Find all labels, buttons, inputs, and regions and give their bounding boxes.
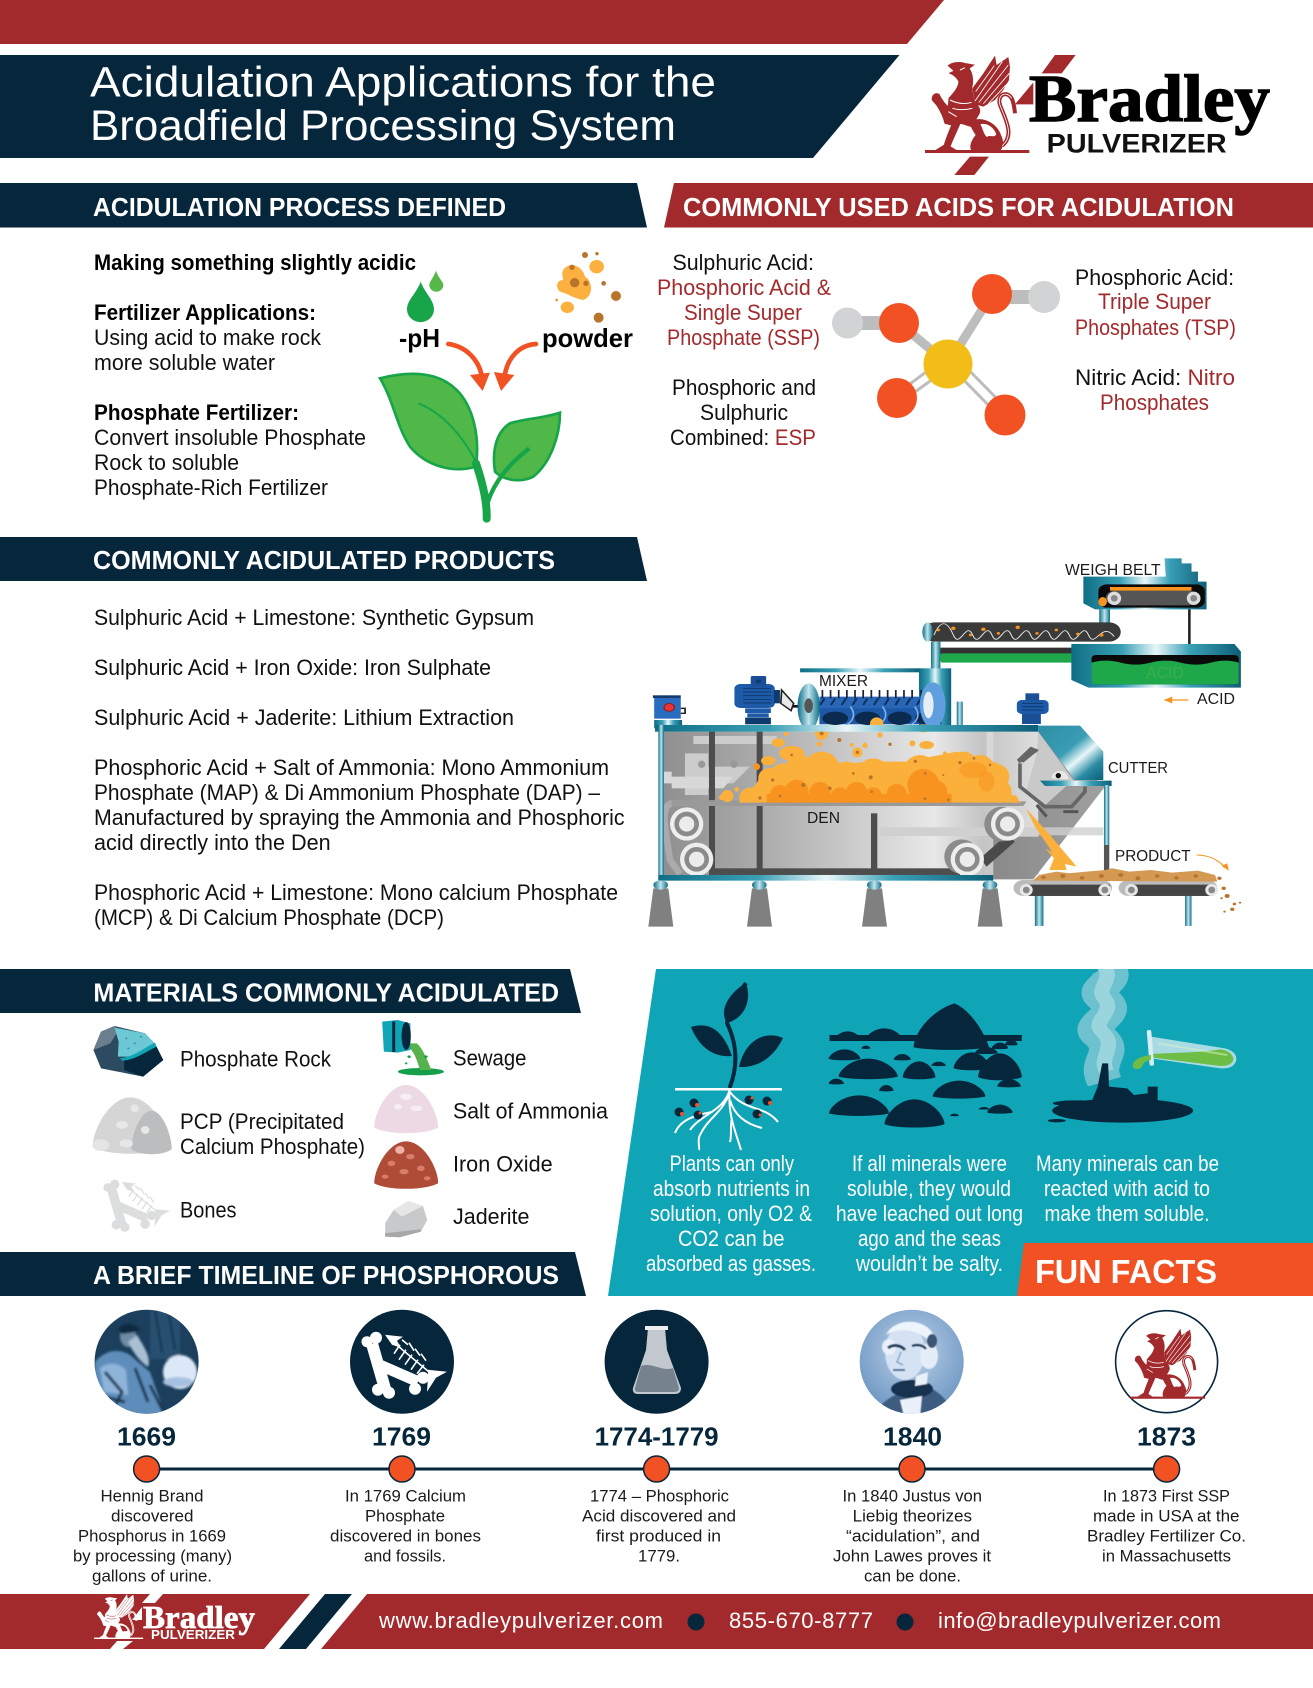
acid list right: Phosphoric Acid: <box>1075 265 1234 290</box>
year: 1840 <box>883 1422 942 1452</box>
description <box>330 1487 481 1566</box>
icon: mineral rocks <box>829 1003 1022 1128</box>
year: 1774-1779 <box>595 1422 719 1452</box>
separator dot <box>688 1614 704 1630</box>
fact 3 text: reacted with acid to <box>1044 1176 1210 1201</box>
fun facts tab: FUN FACTS <box>1035 1253 1217 1290</box>
label: PCP: Calcium Phosphate) <box>180 1134 365 1159</box>
product list: Sulphuric Acid + Jaderite: Lithium Extraction <box>94 705 514 730</box>
description: Phosphorus in 1669 <box>78 1527 226 1546</box>
definition text: Phosphate-Rich Fertilizer <box>94 475 328 500</box>
marker <box>644 1456 670 1482</box>
marker <box>389 1456 415 1482</box>
product list: (MCP) & Di Calcium Phosphate (DCP) <box>94 905 444 930</box>
definition text <box>94 250 416 500</box>
label: bones: Bones <box>180 1198 236 1223</box>
frame <box>655 725 1038 732</box>
1873 entry <box>1087 1311 1246 1566</box>
footer logo: PULVERIZER <box>151 1627 236 1642</box>
fact 1 text: absorbed as gasses. <box>646 1251 816 1276</box>
panel: acidulation process defined <box>0 183 647 519</box>
description: “acidulation”, and <box>846 1527 980 1546</box>
diagram labels: PRODUCT <box>1115 848 1191 865</box>
1840 entry <box>833 1309 991 1586</box>
screw conveyor tube <box>922 622 1121 670</box>
description: In 1873 First SSP <box>1103 1487 1230 1506</box>
fact 1 text: Plants can only <box>670 1151 794 1176</box>
diagram labels: DEN <box>807 810 840 827</box>
year: 1769 <box>372 1422 431 1452</box>
icon: plant <box>380 374 560 519</box>
description: In 1769 Calcium <box>345 1487 466 1506</box>
definition text: Phosphate Fertilizer: <box>94 400 299 425</box>
icon: bones <box>103 1180 170 1232</box>
logo: Bradley Pulverizer: Bradley <box>1029 62 1270 136</box>
description: made in USA at the <box>1093 1507 1240 1526</box>
acid list left: Combined: ESP <box>670 425 816 450</box>
icon: sewage <box>382 1020 444 1075</box>
icon: griffin in circle <box>1116 1311 1218 1413</box>
orange pile <box>738 752 1022 803</box>
description: can be done. <box>864 1567 961 1586</box>
acid list right: Phosphates <box>1100 390 1209 415</box>
acid list left: Phosphoric Acid & <box>657 275 831 300</box>
website: www.bradleypulverizer.com <box>378 1608 663 1633</box>
description: gallons of urine. <box>92 1567 212 1586</box>
fact 1 text: CO2 can be <box>678 1226 784 1251</box>
acid list left: Sulphuric Acid: <box>672 250 814 275</box>
1774-1779 entry <box>582 1310 736 1566</box>
panel: fun facts <box>608 967 1313 1296</box>
panel: brief timeline of phosphorous <box>0 1252 1246 1586</box>
description: Bradley Fertilizer Co. <box>1087 1527 1246 1546</box>
heading bar: ACIDULATION PROCESS DEFINED <box>93 192 506 222</box>
product list: Sulphuric Acid + Iron Oxide: Iron Sulphate <box>94 655 491 680</box>
footer logo: Bradley <box>143 1599 255 1635</box>
label: phosphate rock: Phosphate Rock <box>180 1047 332 1072</box>
panel: materials commonly acidulated <box>0 969 609 1237</box>
legs <box>648 888 1003 927</box>
email: info@bradleypulverizer.com <box>938 1608 1221 1633</box>
fact 2 text: If all minerals were <box>852 1151 1007 1176</box>
icon: molecule <box>832 274 1060 436</box>
logo: Bradley Pulverizer: PULVERIZER <box>1047 129 1227 159</box>
description: discovered in bones <box>330 1527 481 1546</box>
footer stripes <box>264 1594 367 1649</box>
heading bar: COMMONLY USED ACIDS FOR ACIDULATION <box>683 192 1234 222</box>
label: PCP <box>180 1109 365 1159</box>
acid list right: Nitric Acid: Nitro <box>1075 365 1235 390</box>
product list: Sulphuric Acid + Limestone: Synthetic Gypsum <box>94 605 534 630</box>
product list: Manufactured by spraying the Ammonia and Phosphoric <box>94 805 624 830</box>
fact 1 text: absorb nutrients in <box>653 1176 810 1201</box>
diagram labels <box>807 562 1235 865</box>
cutter <box>1018 750 1085 807</box>
diagram labels: MIXER <box>819 673 868 690</box>
acid list right <box>1075 265 1236 415</box>
photo: Hennig Brand <box>94 1309 200 1415</box>
product list: acid directly into the Den <box>94 830 331 855</box>
fact 1 text <box>646 1151 816 1276</box>
marker <box>1154 1456 1180 1482</box>
icon: iron oxide <box>374 1141 438 1189</box>
title banner <box>0 55 900 158</box>
label: salt of ammonia: Salt of Ammonia <box>453 1099 609 1124</box>
description: 1779. <box>638 1547 680 1566</box>
diagram: Broadfield processing system <box>648 558 1241 927</box>
label: jaderite: Jaderite <box>453 1204 530 1229</box>
icon: jaderite <box>385 1201 427 1237</box>
fact 2 text: have leached out long <box>836 1201 1023 1226</box>
phone: 855-670-8777 <box>729 1608 873 1633</box>
description <box>1087 1487 1246 1566</box>
fact 2 text <box>836 1151 1023 1276</box>
description: Phosphate <box>365 1507 445 1526</box>
marker <box>134 1456 160 1482</box>
separator dot <box>896 1614 914 1630</box>
fact 2 text: ago and the seas <box>858 1226 1001 1251</box>
icon: acid drops <box>407 271 443 322</box>
product list: Phosphoric Acid + Limestone: Mono calcium Phosphate <box>94 880 618 905</box>
product list: Phosphoric Acid + Salt of Ammonia: Mono Ammonium <box>94 755 609 780</box>
title text <box>90 58 716 150</box>
icon: acid test tube with smoke <box>1048 967 1236 1123</box>
year: 1873 <box>1137 1422 1196 1452</box>
definition text: Using acid to make rock <box>94 325 322 350</box>
description <box>582 1487 736 1566</box>
heading bar <box>664 183 1313 228</box>
definition text: Convert insoluble Phosphate <box>94 425 366 450</box>
photo: Justus von Liebig <box>859 1309 965 1416</box>
acid list right: Triple Super <box>1098 289 1211 314</box>
acid list left <box>657 250 831 450</box>
diagram labels: ACID <box>1197 691 1235 708</box>
fun facts tab <box>1017 1243 1313 1296</box>
footer logo <box>94 1594 255 1649</box>
mixer <box>792 668 963 730</box>
description: and fossils. <box>364 1547 446 1566</box>
icon: phosphate rock <box>93 1026 163 1077</box>
description <box>73 1487 232 1586</box>
timeline line <box>146 1468 1166 1470</box>
label: powder: powder <box>542 323 633 353</box>
description: in Massachusetts <box>1102 1547 1231 1566</box>
icon: PCP <box>93 1097 172 1154</box>
diagram labels: CUTTER <box>1108 760 1168 777</box>
fact 3 text: Many minerals can be <box>1036 1151 1219 1176</box>
den body with belt and pile <box>648 717 1112 927</box>
acid list left: Phosphate (SSP) <box>667 325 820 350</box>
heading bar: COMMONLY ACIDULATED PRODUCTS <box>93 545 555 575</box>
description: Acid discovered and <box>582 1507 736 1526</box>
description <box>833 1487 991 1586</box>
description: Hennig Brand <box>100 1487 204 1506</box>
description: by processing (many) <box>73 1547 232 1566</box>
description: John Lawes proves it <box>833 1547 991 1566</box>
description: Liebig theorizes <box>853 1507 972 1526</box>
top red banner <box>0 0 944 44</box>
acid list left: Phosphoric and <box>672 375 816 400</box>
label: PCP: PCP (Precipitated <box>180 1109 344 1134</box>
label: iron oxide: Iron Oxide <box>453 1152 553 1177</box>
fact 3 text: make them soluble. <box>1044 1201 1210 1226</box>
heading bar <box>0 183 647 228</box>
product list <box>94 605 624 930</box>
acid list left: Single Super <box>684 300 802 325</box>
diagram labels: ACID <box>1146 665 1184 682</box>
logo: Bradley Pulverizer <box>925 55 1270 175</box>
marker <box>899 1456 925 1482</box>
acid list left: Sulphuric <box>700 400 788 425</box>
heading bar: MATERIALS COMMONLY ACIDULATED <box>93 978 559 1008</box>
definition text: more soluble water <box>94 350 275 375</box>
diagram labels: WEIGH BELT <box>1065 562 1161 579</box>
product conveyor <box>1013 697 1241 926</box>
1669 entry <box>73 1309 232 1586</box>
footer <box>0 1594 1313 1649</box>
product list: Phosphate (MAP) & Di Ammonium Phosphate (DAP) – <box>94 780 601 805</box>
heading bar <box>0 1252 586 1296</box>
fact 1 text: solution, only O2 & <box>650 1201 812 1226</box>
fact 3 text <box>1036 1151 1219 1226</box>
icon: flask in circle <box>605 1310 709 1414</box>
description: discovered <box>111 1507 194 1526</box>
heading bar <box>0 537 647 581</box>
icon: bones in circle <box>350 1310 454 1414</box>
fact 2 text: soluble, they would <box>847 1176 1011 1201</box>
description: 1774 – Phosphoric <box>590 1487 729 1506</box>
fact 2 text: wouldn’t be salty. <box>855 1251 1003 1276</box>
year: 1669 <box>117 1422 176 1452</box>
icon: salt of ammonia <box>374 1085 438 1133</box>
panel: commonly used acids <box>657 183 1313 450</box>
arrows into plant <box>448 344 536 391</box>
acid list right: Phosphates (TSP) <box>1075 315 1236 340</box>
title text: Acidulation Applications for the <box>90 58 716 106</box>
heading bar: A BRIEF TIMELINE OF PHOSPHOROUS <box>93 1260 559 1290</box>
definition text: Fertilizer Applications: <box>94 300 316 325</box>
description: In 1840 Justus von <box>842 1487 982 1506</box>
icon: plant with roots <box>674 983 783 1150</box>
description: first produced in <box>596 1527 721 1546</box>
definition text: Rock to soluble <box>94 450 239 475</box>
icon: powder <box>555 252 621 323</box>
label: -pH: -pH <box>399 323 440 353</box>
motors <box>653 676 1049 728</box>
1769 entry <box>330 1310 481 1566</box>
title text: Broadfield Processing System <box>90 102 676 150</box>
panel: commonly acidulated products <box>0 537 647 930</box>
acid tube and tank <box>940 644 1241 688</box>
definition text: Making something slightly acidic <box>94 250 416 275</box>
weigh belt <box>1083 558 1207 649</box>
heading bar <box>0 969 581 1013</box>
label: sewage: Sewage <box>453 1046 526 1071</box>
